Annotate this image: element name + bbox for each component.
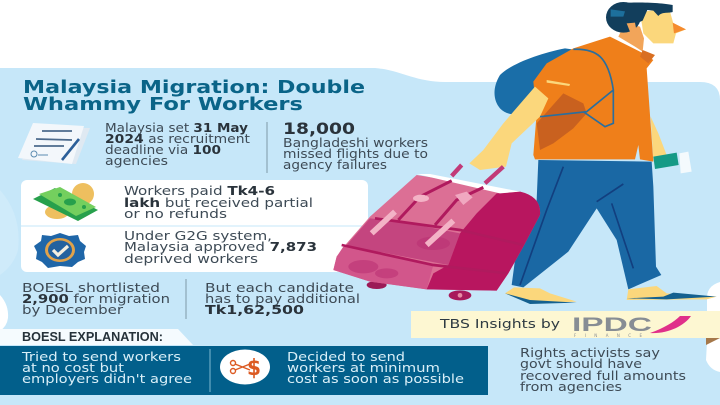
logo: IPDC Finance: IPDC	[572, 315, 652, 336]
text: minimum cost: workers at minimum	[287, 361, 440, 375]
straps	[342, 181, 523, 273]
icon: cost cut	[220, 350, 270, 384]
stat: 18,000 workers: missed flights due to	[283, 147, 428, 161]
text: recruitment deadline: agencies	[105, 154, 168, 168]
tab: BOESL explanation: BOESL EXPLANATION:	[22, 330, 163, 344]
logo: IPDC Finance: FINANCE	[574, 333, 642, 338]
text: minimum cost: cost as soon as possible	[287, 372, 464, 386]
stat: 18,000 workers: Bangladeshi workers	[283, 136, 428, 150]
handle	[452, 165, 503, 183]
left arm and hand	[469, 87, 548, 170]
text: rights activists	[520, 346, 686, 394]
text: G2G approval: Under G2G system,	[124, 229, 272, 243]
stat: 18,000 workers: agency failures	[283, 158, 387, 172]
text: rights activists: from agencies	[520, 380, 622, 394]
text: BOESL shortlisted: 2,900 for migration	[22, 292, 170, 306]
pale shape behind card	[0, 190, 19, 275]
stat: 18,000 workers	[283, 119, 428, 172]
text: refunds: Workers paid Tk4-6	[124, 184, 275, 198]
hair	[606, 2, 673, 33]
body	[333, 175, 540, 291]
title: Whammy For Workers	[23, 94, 303, 115]
illustration: head	[606, 2, 686, 63]
logo: IPDC Finance	[572, 315, 691, 338]
backpack	[494, 48, 577, 114]
text: rights activists: Rights activists say	[520, 346, 660, 360]
text: BOESL shortlisted	[22, 281, 170, 317]
text: rights activists: govt should have	[520, 357, 642, 371]
text: recruitment deadline: deadline via 100	[105, 143, 221, 157]
text: minimum cost: Decided to send	[287, 350, 405, 364]
text: G2G approval: deprived workers	[124, 252, 258, 266]
text: additional payment	[205, 281, 360, 317]
illustration: man	[469, 37, 717, 304]
text: refunds	[124, 184, 313, 221]
text: recruitment deadline	[105, 121, 250, 168]
brown edge detail	[706, 338, 720, 345]
text: tried at no cost: at no cost but	[22, 361, 124, 375]
right arm and card	[651, 117, 692, 173]
mottled texture	[348, 237, 450, 278]
icon: approval badge	[34, 233, 86, 268]
illustration: suitcase	[333, 165, 540, 300]
icon: cost cut: $	[247, 356, 261, 381]
title: Malaysia Migration: Double	[23, 77, 365, 98]
tab: BOESL explanation	[0, 329, 193, 345]
text: minimum cost	[287, 350, 464, 386]
feet	[505, 286, 717, 304]
text: recruitment deadline: Malaysia set 31 May	[105, 121, 248, 135]
text: refunds: or no refunds	[124, 207, 227, 221]
text: additional payment: Tk1,62,500	[205, 302, 304, 317]
banner: TBS Insights: TBS Insights by	[439, 316, 561, 331]
text: recruitment deadline: 2024 as recruitment	[105, 132, 250, 146]
text: tried at no cost: employers didn't agree	[22, 372, 192, 386]
neck	[618, 23, 644, 52]
panel: BOESL explanation	[0, 346, 488, 395]
text: rights activists: recovered full amounts	[520, 369, 686, 383]
text: BOESL shortlisted: BOESL shortlisted	[22, 281, 160, 295]
pants	[512, 160, 661, 289]
straps	[540, 49, 613, 127]
text: G2G approval	[124, 229, 317, 266]
stat: 18,000 workers: 18,000	[283, 119, 355, 138]
shirt	[533, 37, 653, 162]
text: refunds: lakh but received partial	[124, 196, 313, 210]
face	[640, 10, 686, 43]
text: additional payment: has to pay additional	[205, 292, 360, 306]
title	[23, 77, 365, 115]
banner: TBS Insights	[411, 311, 720, 338]
wheels	[367, 281, 471, 300]
text: tried at no cost	[21, 350, 192, 386]
text: BOESL shortlisted: by December	[22, 303, 123, 317]
text: additional payment: But each candidate	[205, 281, 354, 295]
icon: documents	[18, 123, 90, 164]
text: tried at no cost: Tried to send workers	[21, 350, 181, 364]
text: G2G approval: Malaysia approved 7,873	[124, 240, 317, 254]
panel: white card	[21, 180, 368, 272]
white edge shapes	[0, 282, 720, 372]
icon: money	[33, 183, 98, 221]
ear	[627, 23, 637, 33]
